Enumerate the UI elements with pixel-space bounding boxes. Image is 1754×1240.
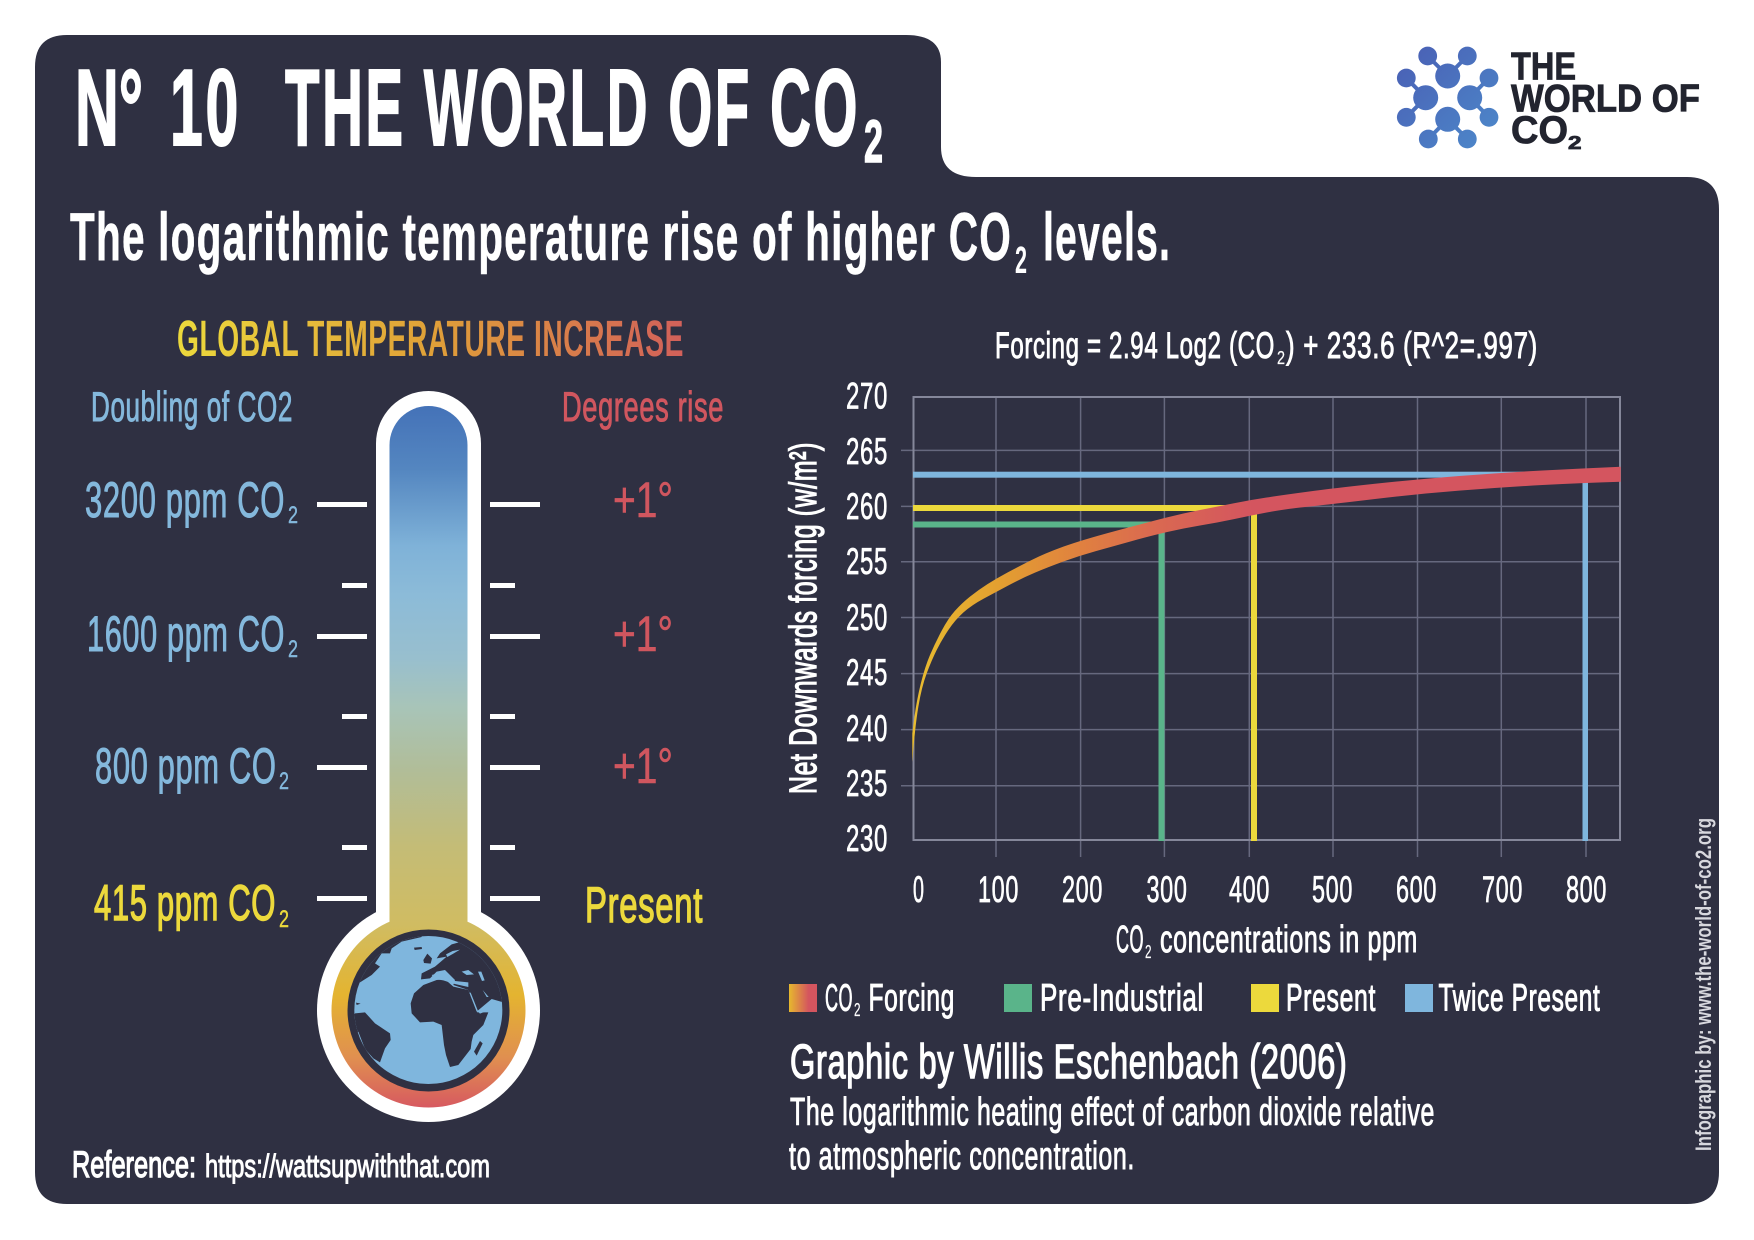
x axis labels: 200: [1062, 869, 1103, 910]
degrees rise values: +1°: [613, 738, 673, 794]
heading: global temperature increase: GLOBAL TEMPERATURE INCREASE: [177, 310, 684, 367]
degrees rise values: +1°: [613, 606, 673, 662]
label: 415 ppm: [94, 875, 289, 933]
icon: globe: [347, 922, 513, 1092]
label: present: Present: [585, 877, 703, 933]
x axis title: concentrations in ppm: [1160, 919, 1418, 961]
title: [75, 47, 883, 175]
y axis labels: 235: [846, 763, 888, 804]
label: 415 ppm: 2: [279, 906, 289, 933]
subtitle: [70, 199, 1171, 282]
subtitle: levels.: [1043, 199, 1171, 275]
scale ticks: [317, 502, 540, 901]
logo wordmark: WORLD OF: [1511, 78, 1700, 120]
CO2 forcing curve: [912, 467, 1621, 762]
x axis title: CO: [1116, 919, 1144, 961]
x axis labels: 100: [978, 869, 1019, 910]
thermometer: [317, 391, 540, 1122]
label: 800 ppm: 800 ppm CO: [95, 738, 276, 794]
title: 2: [864, 108, 883, 175]
y axis title: Net Downwards forcing (w/m²): [783, 442, 825, 794]
subtitle: 2: [1015, 240, 1027, 282]
description text: [789, 1091, 1435, 1178]
vertical credit: Infographic by: www.the-world-of-co2.org: [1691, 818, 1716, 1151]
label: 415 ppm: 415 ppm CO: [94, 875, 276, 931]
title: THE WORLD OF CO: [285, 47, 860, 169]
x axis labels: 700: [1482, 869, 1523, 910]
subtitle: The logarithmic temperature rise of higher CO: [70, 199, 1012, 275]
chart formula: ) + 233.6 (R^2=.997): [1286, 325, 1538, 366]
thermometer outer white casing: [317, 391, 540, 1122]
logo wordmark: [1511, 46, 1700, 153]
y axis labels: 260: [846, 486, 888, 527]
x axis labels: 500: [1312, 869, 1353, 910]
legend: twice present: [1405, 978, 1600, 1020]
legend: CO2 forcing: [789, 978, 955, 1020]
label: 3200 ppm: 3200 ppm CO: [85, 472, 285, 528]
x axis labels: 0: [913, 869, 924, 910]
column heading: degrees rise: Degrees rise: [562, 383, 724, 430]
y axis labels: 255: [846, 541, 888, 582]
y axis labels: 230: [846, 818, 888, 859]
chart: net downwards forcing vs CO2 concentration: [783, 325, 1621, 1020]
x axis title: 2: [1145, 942, 1152, 962]
description text: to atmospheric concentration.: [789, 1135, 1135, 1178]
label: 3200 ppm: [85, 472, 298, 529]
x axis labels: [913, 869, 1607, 910]
legend: CO2 forcing: CO: [825, 978, 853, 1020]
panel: global temperature increase thermometer: [85, 310, 724, 1122]
attribution heading: Graphic by Willis Eschenbach (2006): [790, 1036, 1348, 1089]
y axis labels: 250: [846, 597, 888, 638]
x axis labels: 600: [1396, 869, 1437, 910]
degrees rise values: [613, 472, 673, 794]
pre-industrial lines: [913, 522, 1164, 841]
logo: The World of CO2: [1397, 46, 1700, 153]
legend: CO2 forcing: Forcing: [868, 978, 955, 1020]
thermometer gradient fill: [332, 406, 526, 1108]
label: 800 ppm: [95, 738, 289, 795]
reference: https://wattsupwiththat.com: [205, 1148, 490, 1184]
column heading: doubling of CO2: Doubling of CO2: [91, 383, 293, 430]
label: 1600 ppm: 1600 ppm CO: [87, 606, 285, 662]
x axis labels: 300: [1146, 869, 1188, 910]
legend: pre-industrial: Pre-Industrial: [1040, 978, 1204, 1020]
y axis labels: 240: [846, 708, 888, 749]
x axis labels: 400: [1229, 869, 1270, 910]
legend: twice present: Twice Present: [1438, 978, 1600, 1020]
logo wordmark: 2: [1568, 133, 1582, 153]
x axis labels: 800: [1566, 869, 1607, 910]
icon: molecule network: [1397, 47, 1498, 148]
reference lines: [913, 472, 1588, 841]
logo wordmark: THE: [1511, 46, 1576, 88]
title: N°: [75, 47, 143, 169]
label: 1600 ppm: 2: [288, 636, 298, 663]
twice present lines: [913, 472, 1588, 841]
label: 800 ppm: 2: [279, 768, 289, 795]
legend: present: [1251, 978, 1376, 1020]
y axis labels: 245: [846, 652, 888, 693]
label: 3200 ppm: 2: [288, 502, 298, 529]
legend: pre-industrial: [1004, 978, 1204, 1020]
title: 10: [170, 47, 241, 169]
label: 1600 ppm: [87, 606, 298, 663]
legend: present: Present: [1286, 978, 1376, 1020]
legend: [789, 978, 1600, 1020]
reference: Reference:: [72, 1144, 196, 1185]
x axis title: [1116, 919, 1418, 962]
degrees rise values: +1°: [613, 472, 673, 528]
y axis labels: 265: [846, 431, 888, 472]
present lines: [913, 505, 1257, 841]
reference: [72, 1144, 490, 1185]
grid and axes: [901, 397, 1620, 857]
y axis labels: 270: [846, 376, 888, 416]
chart formula: 2: [1277, 348, 1285, 368]
chart formula: Forcing = 2.94 Log2 (CO: [995, 325, 1275, 366]
legend: CO2 forcing: 2: [854, 1000, 860, 1020]
y axis labels: [846, 376, 888, 859]
logo wordmark: CO: [1511, 109, 1568, 152]
